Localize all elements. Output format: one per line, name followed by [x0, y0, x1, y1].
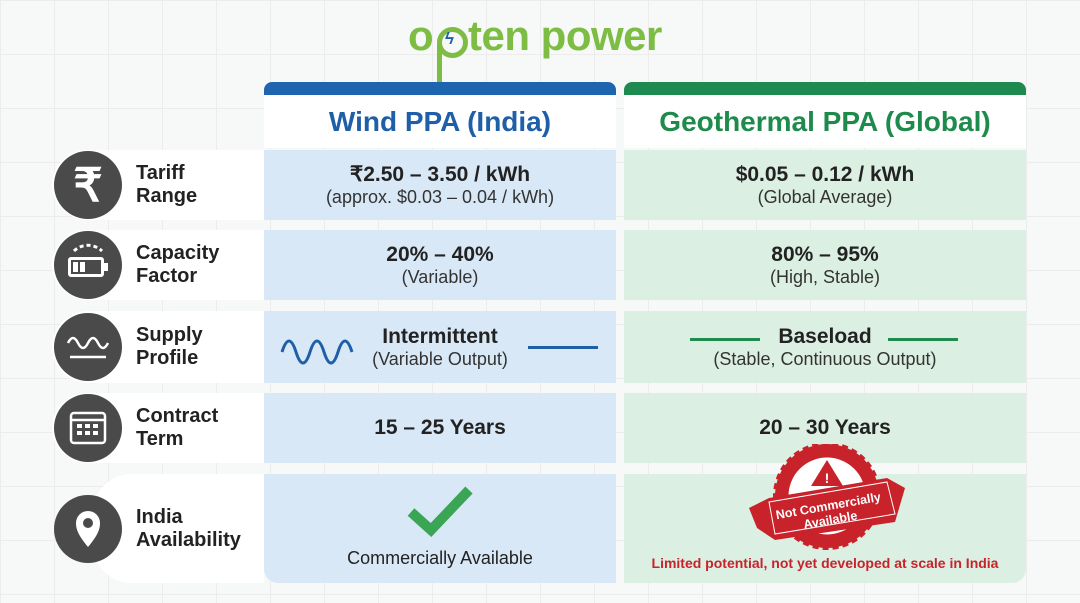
row label: capacity: Capacity [136, 242, 219, 264]
text: Availability [136, 529, 241, 551]
text: (Variable Output) [372, 348, 508, 368]
text: 15 – 25 Years [374, 416, 506, 439]
row label: contract: Contract [136, 405, 218, 427]
geo cells: $0.05 – 0.12 / kWh [736, 162, 914, 186]
text: (High, Stable) [770, 266, 880, 286]
wind cells: ₹2.50 – 3.50 / kWh [350, 163, 530, 186]
header: geothermal: Geothermal PPA (Global) [659, 106, 991, 137]
logo: ten power [468, 12, 662, 59]
wind cells: (approx. $0.03 – 0.04 / kWh) [326, 187, 554, 207]
logo: ϟ [445, 29, 454, 48]
text: Commercially Available [347, 548, 533, 568]
row label: tariff [52, 150, 264, 220]
logo [408, 12, 662, 82]
badge: not commercially available: Available [802, 508, 858, 532]
row label: tariff: Range [136, 185, 197, 207]
row label: contract: Term [136, 428, 183, 450]
row label: availability [92, 474, 264, 583]
text: Baseload [778, 324, 872, 348]
text: India [136, 506, 183, 528]
text: Limited potential, not yet developed at scale in India [652, 555, 998, 571]
badge: not commercially available [749, 444, 905, 550]
geo cells [624, 150, 1026, 220]
badge: not commercially available: Not Commercially [775, 490, 882, 522]
text: (Stable, Continuous Output) [713, 348, 937, 368]
text: 80% – 95% [771, 242, 879, 266]
logo: o [408, 12, 434, 59]
header: geothermal [624, 82, 1026, 148]
header: wind: Wind PPA (India) [329, 106, 551, 137]
text: (Variable) [402, 266, 478, 286]
row label: tariff: ₹ [73, 159, 103, 211]
row label: contract [52, 393, 264, 463]
wave icon [280, 340, 354, 364]
checkmark [408, 486, 472, 537]
text: Intermittent [382, 324, 498, 348]
row label: tariff: Tariff [136, 162, 185, 184]
geo cells: (Global Average) [758, 186, 892, 206]
row label: supply: Profile [136, 347, 198, 369]
row label: supply [52, 311, 264, 383]
badge: not commercially available: ! [825, 470, 829, 486]
wind cells [264, 150, 616, 220]
row label: capacity [52, 230, 264, 300]
text: 20% – 40% [386, 242, 494, 266]
header: wind [264, 82, 616, 148]
row label: supply: Supply [136, 324, 203, 346]
row label: capacity: Factor [136, 265, 197, 287]
text: 20 – 30 Years [759, 416, 891, 439]
